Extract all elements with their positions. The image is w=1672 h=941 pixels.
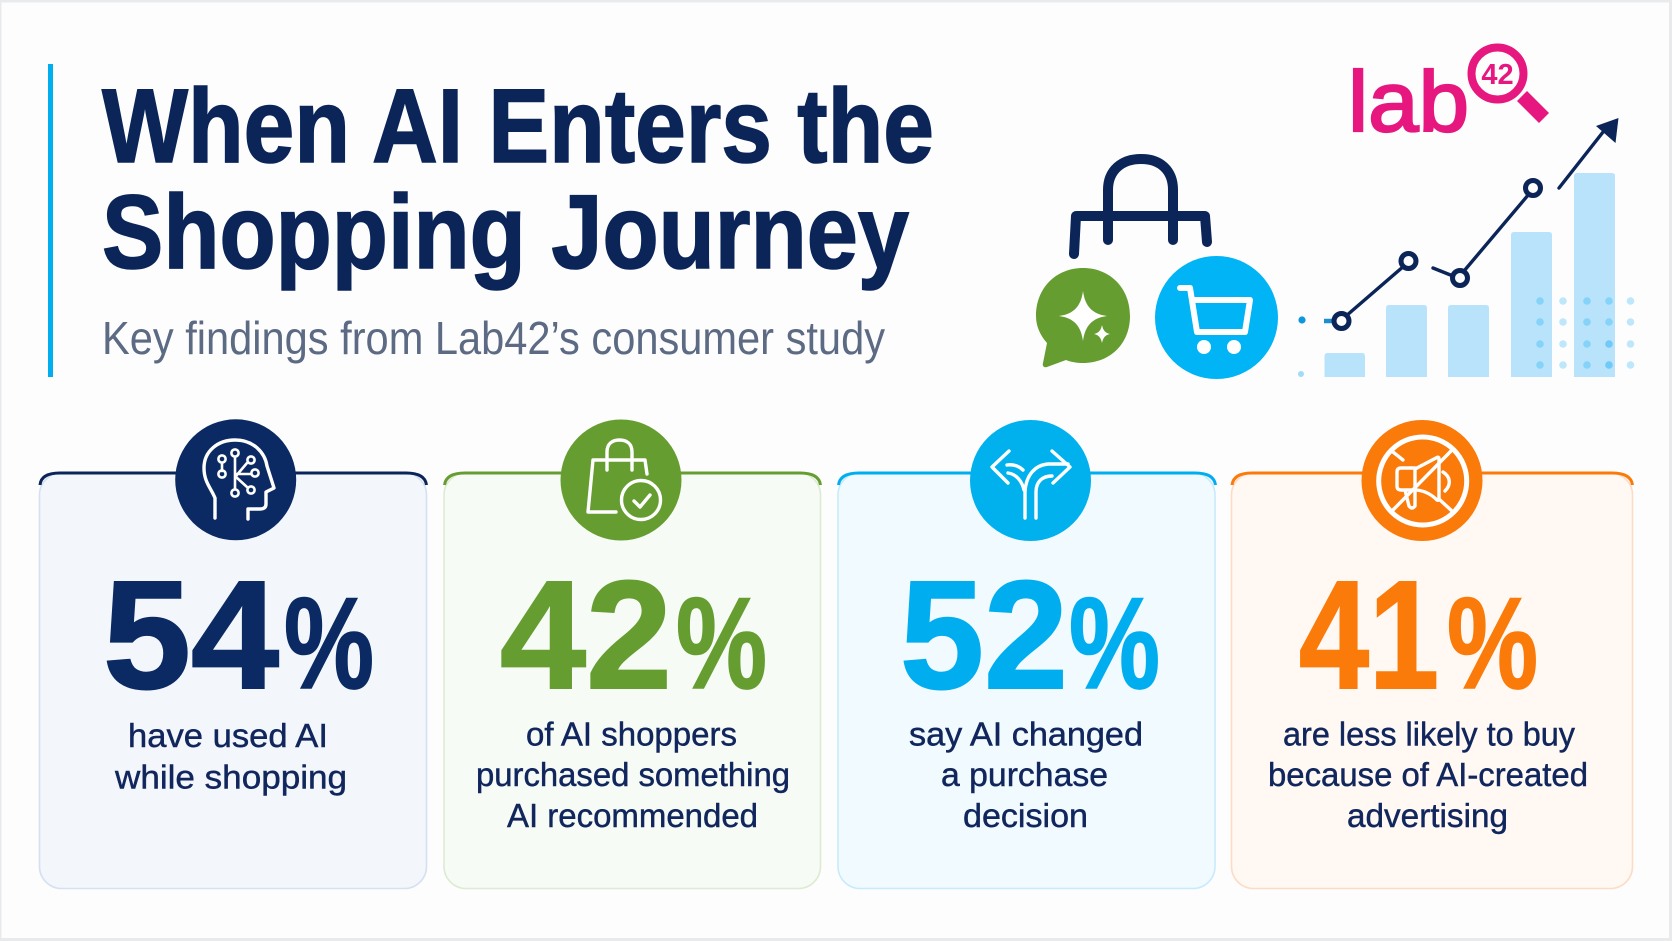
- description: advertising: [1347, 797, 1508, 834]
- description: decision: [963, 797, 1088, 834]
- subtitle: Key findings from Lab42’s consumer study: [102, 312, 885, 364]
- trend line: [1346, 127, 1607, 316]
- chart bars: [1324, 173, 1615, 377]
- description: because of AI-created: [1268, 756, 1588, 793]
- icon: AI chat bubble: [1036, 268, 1130, 367]
- icon: no AI advertising: [1362, 420, 1482, 541]
- panel: 54%: [40, 419, 426, 888]
- icon: shopping cart circle: [1155, 256, 1278, 379]
- logo: lab42: [1348, 48, 1549, 150]
- panel: 41%: [1232, 420, 1632, 888]
- title: Shopping Journey: [102, 174, 909, 291]
- stat: 42%: [500, 549, 767, 721]
- icon: diverging arrows: [970, 420, 1091, 541]
- description: have used AI: [128, 717, 328, 754]
- stat: 54%: [103, 549, 374, 721]
- accent bar: [48, 64, 53, 377]
- description: of AI shoppers: [526, 716, 737, 752]
- description: say AI changed: [909, 716, 1143, 752]
- stat: 52%: %: [1069, 570, 1160, 716]
- description: purchased something: [476, 756, 790, 793]
- title: [102, 68, 934, 291]
- stat: 52%: [900, 549, 1160, 721]
- description: AI recommended: [507, 797, 758, 834]
- description: [476, 716, 790, 834]
- bar chart with trend line: [1298, 118, 1634, 377]
- arrow head: [1596, 118, 1618, 143]
- icon: shopping bag handle: [1074, 159, 1207, 254]
- description: while shopping: [114, 758, 347, 796]
- description: a purchase: [941, 756, 1108, 793]
- dot grid: [1536, 297, 1634, 369]
- description: are less likely to buy: [1283, 716, 1575, 752]
- logo: lab42: lab: [1348, 55, 1469, 150]
- description: [114, 717, 347, 796]
- description: [1268, 716, 1588, 834]
- stat: 42%: 42: [500, 549, 672, 721]
- stat: 54%: %: [284, 570, 374, 716]
- stat: 54%: 54: [103, 549, 279, 721]
- description: [909, 716, 1143, 834]
- icon: AI head: [175, 419, 296, 540]
- stat: 42%: %: [676, 570, 767, 716]
- stat: 41%: 41: [1299, 549, 1439, 721]
- stat: 52%: 52: [900, 549, 1068, 721]
- title: When AI Enters the: [102, 68, 934, 185]
- panel: 42%: [444, 420, 820, 888]
- logo: lab42: 42: [1481, 59, 1514, 91]
- icon: bag with check: [560, 420, 682, 540]
- panel: 52%: [838, 420, 1216, 888]
- stat: 41%: %: [1447, 570, 1538, 716]
